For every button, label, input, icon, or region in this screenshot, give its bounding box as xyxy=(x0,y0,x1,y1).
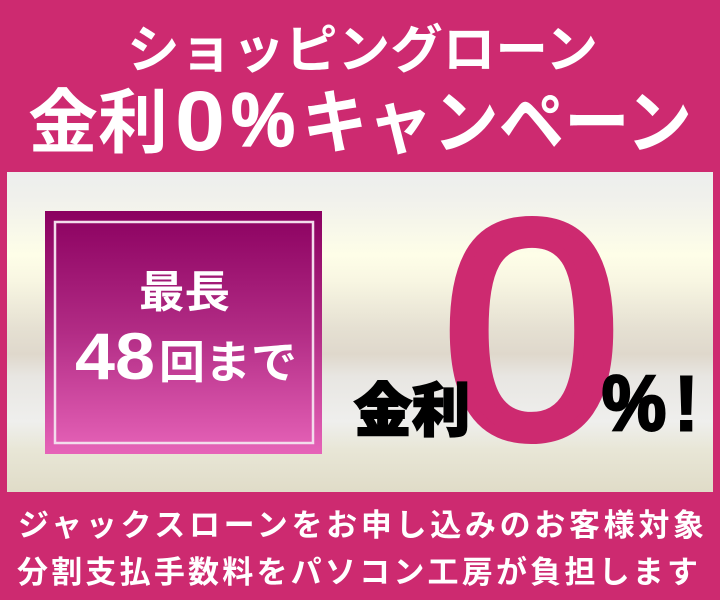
text: longest: 最長 xyxy=(139,268,230,317)
title part: interest rate: 金利 xyxy=(28,84,168,162)
footer line one: ジャックスローンをお申し込みのお客様対象 xyxy=(18,508,704,543)
title part: campaign: キャンペーン xyxy=(302,84,692,162)
footer line two: 分割支払手数料をパソコン工房が負担します xyxy=(17,555,698,590)
panel: term box xyxy=(45,211,322,454)
text: times: 回まで xyxy=(159,337,297,388)
text: up to 48 payments: 48 xyxy=(75,319,155,393)
text: percent: % xyxy=(602,359,666,447)
panel: main gradient xyxy=(7,158,713,502)
title: 0% interest campaign xyxy=(28,74,692,168)
title part: percent: % xyxy=(231,78,295,163)
title part: zero: 0 xyxy=(175,74,225,168)
text: interest rate: 金利 xyxy=(354,379,470,444)
big zero: 0 xyxy=(442,158,621,502)
title: shopping loan: ショッピングローン xyxy=(127,22,598,80)
text: exclamation: ! xyxy=(673,359,700,448)
